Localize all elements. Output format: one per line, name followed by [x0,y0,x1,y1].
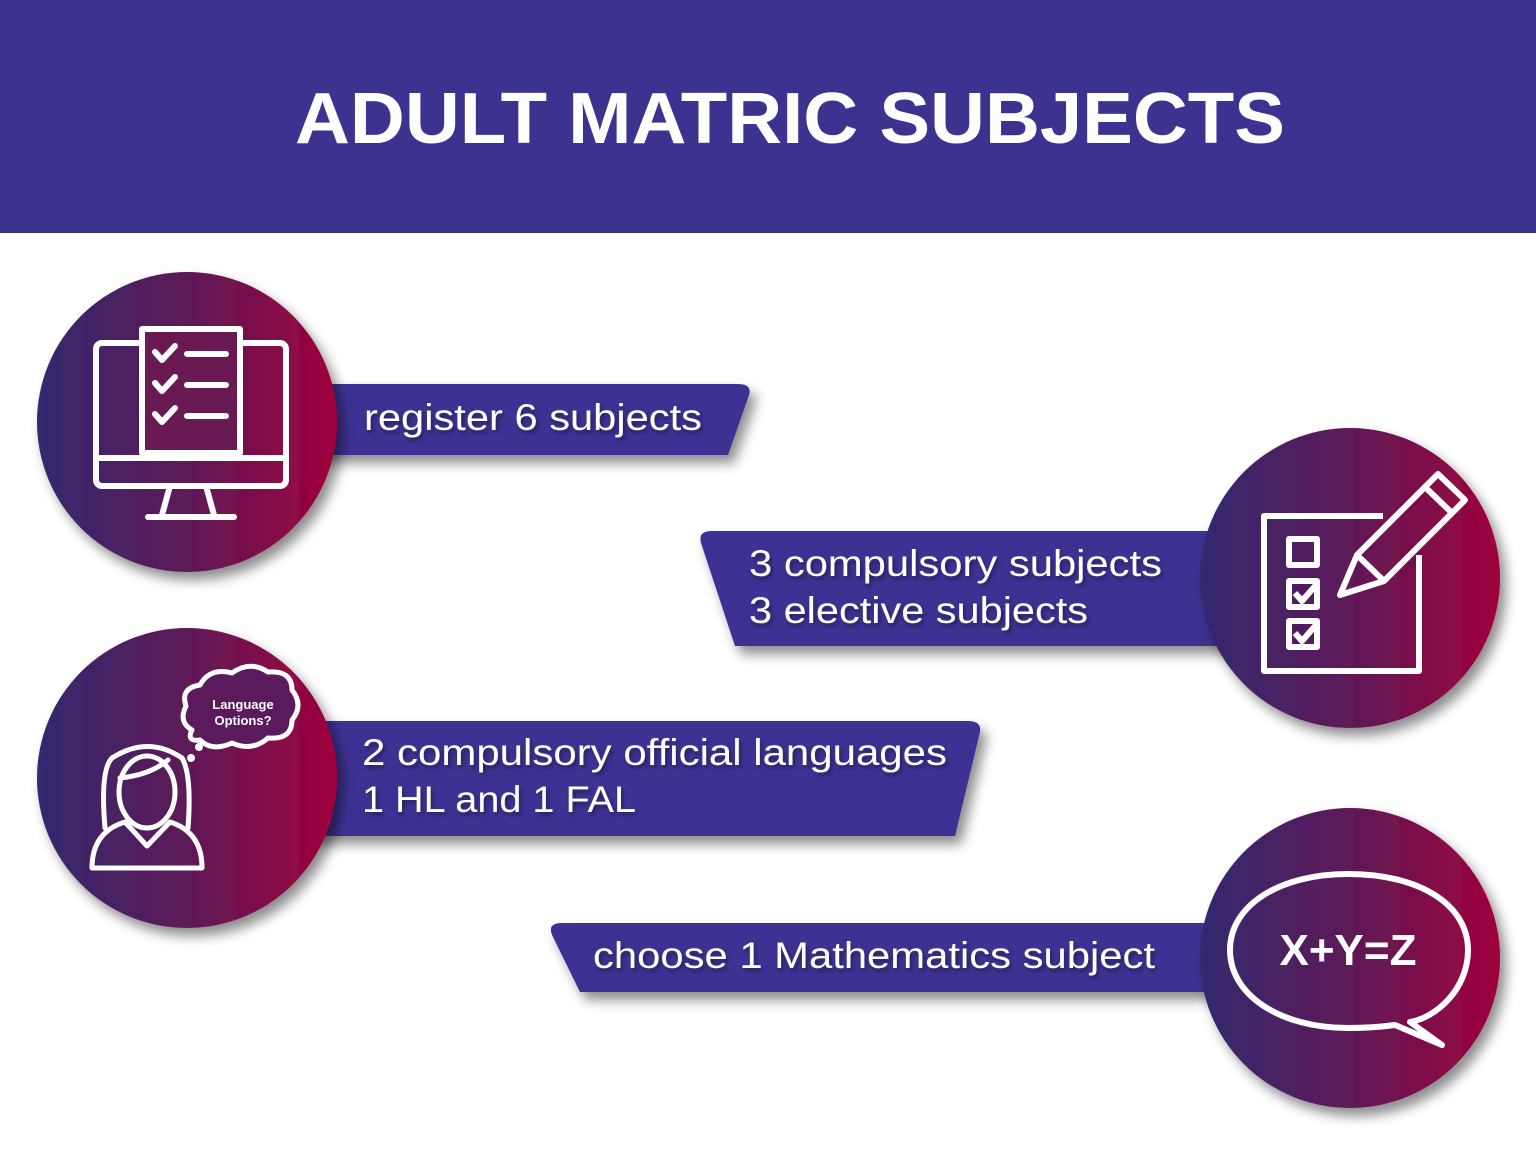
bar: mathematics [551,923,1240,992]
circle: computer checklist icon [37,272,337,572]
bar: register 6 subjects [300,384,750,455]
bar: compulsory and elective: 3 elective subjects [749,590,1088,631]
bar: compulsory and elective [700,531,1240,646]
thought text: Language [212,697,274,712]
bar: register 6 subjects: register 6 subjects [364,397,702,438]
bar: languages: 2 compulsory official languages [362,732,947,773]
circle: checklist with pencil icon [1200,428,1500,728]
equation text: X+Y=Z [1280,926,1416,975]
circle: person with language thought bubble [37,628,337,928]
circle: speech bubble equation [1200,808,1500,1108]
bar: mathematics: choose 1 Mathematics subject [593,935,1156,976]
title: ADULT MATRIC SUBJECTS [295,79,1285,159]
bar: languages: 1 HL and 1 FAL [362,779,636,820]
circle: person with language thought bubble: Options? [214,713,272,728]
bar: languages [300,721,980,836]
bar: compulsory and elective: 3 compulsory subjects [749,543,1162,584]
header banner [0,0,1536,233]
